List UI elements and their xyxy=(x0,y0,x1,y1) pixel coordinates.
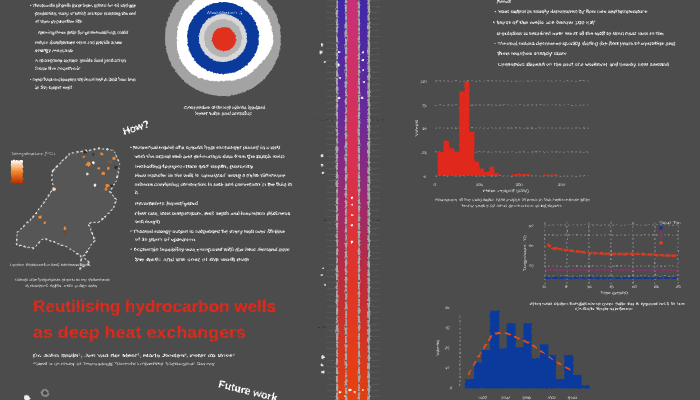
text block: introduction bullets: • Deep heat exchangers are insulated to limit heat loss xyxy=(30,77,136,83)
red line xyxy=(547,244,677,256)
caption: histogram: Histogram of the calculated heat output of wells in the Netherlands after xyxy=(435,197,591,202)
central tube xyxy=(347,0,358,400)
wall specks xyxy=(337,0,368,400)
caption: histogram xyxy=(435,197,591,208)
outer casing xyxy=(336,0,370,400)
y tick labels: 25 xyxy=(422,150,427,155)
text block: method: Heat transfer in the well is calculated using a finite difference xyxy=(135,173,285,179)
y tick labels: 100 xyxy=(420,79,427,84)
text block: introduction bullets: from the reservoir xyxy=(35,66,80,72)
x tick labels: 0 xyxy=(543,284,546,289)
text block: method: • Thermal energy output is calculated for every well over lifetime xyxy=(130,229,285,235)
map colour bar xyxy=(11,160,23,183)
caption: map xyxy=(15,277,110,288)
y axis label: Wells xyxy=(414,120,419,136)
red core xyxy=(212,27,236,51)
text block: method: and length xyxy=(135,219,160,225)
x tick labels: 0 xyxy=(434,182,437,187)
x tick labels xyxy=(434,182,565,187)
legend: Tout Tin xyxy=(659,220,681,225)
text block: introduction bullets: • Thousands of wells have been drilled for oil and gas xyxy=(30,3,136,9)
y tick labels xyxy=(420,79,427,179)
title xyxy=(33,297,276,342)
x tick labels: 300 xyxy=(558,182,565,187)
y axis label: Temperature (°C) xyxy=(522,234,527,271)
x tick labels: 2000 xyxy=(501,395,511,400)
caption: cross-section: inner tube and annulus xyxy=(195,111,252,117)
y tick labels xyxy=(445,305,453,390)
text block: method: Parameters investigated xyxy=(135,201,198,207)
chart: heat output histogram (red) xyxy=(414,79,590,193)
text block: results: Result xyxy=(497,0,511,5)
text block: method: with the actual well and subsurface data from the Dutch wells xyxy=(134,154,285,160)
x axis label: Time (years) xyxy=(600,290,629,295)
text block: results xyxy=(493,0,675,68)
text block: method: it xyxy=(135,190,138,196)
text block: results: • Most of the wells are below 100 kW xyxy=(493,20,596,26)
depth ticks xyxy=(316,120,385,327)
caption: map: at reservoir depth, from public data xyxy=(25,283,98,288)
map: Netherlands well temperatures xyxy=(10,148,120,268)
title: Reutilising hydrocarbon wells xyxy=(33,297,276,316)
left annulus xyxy=(338,0,345,400)
legend xyxy=(659,220,681,245)
text block: method: Flow rate, inlet temperature, well depth and insulation thickness xyxy=(135,211,290,217)
depth labels xyxy=(320,44,326,374)
x tick labels: 10 xyxy=(587,284,592,289)
ring labels: Insulation 1 xyxy=(207,10,244,15)
y tick labels: 60 xyxy=(529,223,534,228)
caption: map: Bottom hole temperature of wells in the Netherlands xyxy=(15,277,110,282)
grid lines xyxy=(435,81,590,176)
x axis label: Heat output (kW) xyxy=(483,188,530,193)
text block: method: the wells and the cost of the work over xyxy=(135,257,250,263)
x tick labels: 25 xyxy=(654,284,659,289)
y tick labels: 10 xyxy=(445,365,450,370)
caption: histogram: thirty years of heat production in kilowatts xyxy=(462,203,562,208)
y tick labels: 30 xyxy=(445,325,450,330)
blue line xyxy=(545,277,677,279)
text block: results: • Heat output is mainly determined by flow rate and temperature xyxy=(495,9,647,15)
chart: well depth histogram (blue) xyxy=(435,305,590,400)
x tick labels: 1000 xyxy=(478,395,488,400)
text block: introduction bullets: in the upper well xyxy=(35,85,72,91)
text block: results: Economics depend on the cost of a workover and nearby heat demand xyxy=(498,62,669,68)
text block: method xyxy=(130,145,292,263)
x tick labels: 100 xyxy=(476,182,483,187)
text block: introduction bullets: production, many of which are now reaching the end xyxy=(35,11,136,17)
text block: method: scheme combining conduction in rock and convection in the fluid in xyxy=(135,182,292,188)
y tick labels: 0 xyxy=(450,385,453,390)
orange curve xyxy=(468,333,573,375)
x tick labels xyxy=(543,284,681,289)
x tick labels: 20 xyxy=(632,284,637,289)
chart: temperature over time (lines) xyxy=(522,220,681,295)
text block: results: Insulation is required over most of the well to limit heat loss in the xyxy=(497,31,664,37)
blue bars xyxy=(465,311,590,388)
x tick labels: 5000 xyxy=(568,395,578,400)
blue annulus ring xyxy=(187,2,259,74)
caption: temperature chart xyxy=(530,302,685,311)
right annulus xyxy=(360,0,368,400)
caption: temperature chart: Dutch subsurface xyxy=(575,307,633,311)
text block: method: • Economic feasibility was compared with the heat demand near xyxy=(130,247,290,253)
grid xyxy=(544,222,680,287)
text block: introduction bullets: of their productive life xyxy=(35,19,82,25)
white flow markers xyxy=(338,51,365,397)
text block: introduction bullets xyxy=(30,3,136,91)
caption: cross-section: Cross-section of the well with the insulated xyxy=(184,105,265,111)
bottom-left icons xyxy=(24,389,49,400)
title: as deep heat exchangers xyxy=(33,323,246,342)
map outline xyxy=(17,148,120,268)
y tick labels: 20 xyxy=(445,345,450,350)
x tick labels: 30 xyxy=(676,284,681,289)
map legend title: Temperature (°C) xyxy=(11,151,56,156)
purple line xyxy=(547,269,677,271)
heading: How?: How? xyxy=(122,119,151,138)
text block: method: of 30 years of operation xyxy=(135,237,195,243)
text block: introduction bullets: energy resource xyxy=(35,48,73,54)
text block: introduction bullets: reduce abandonment costs and provide a new xyxy=(35,40,122,46)
caption: temperature chart: Inlet and outlet temperature over time for a typical well in the xyxy=(530,302,685,306)
speckled halo xyxy=(331,0,375,400)
y tick labels: 75 xyxy=(422,103,427,108)
y tick labels: 0 xyxy=(424,174,427,179)
inner grey ring xyxy=(199,14,247,62)
white cement ring xyxy=(177,0,273,81)
text block: introduction bullets: Reusing these wells for geothermal heat could xyxy=(38,30,128,36)
text block: method: • Numerical model of a coaxial heat exchanger placed in a well xyxy=(130,145,280,151)
x tick labels: 3000 xyxy=(522,395,532,400)
authors xyxy=(33,353,236,366)
text block: results: then reaches steady state xyxy=(497,51,567,57)
y tick labels: 40 xyxy=(529,243,534,248)
diagram: well cross-section target xyxy=(165,0,281,96)
caption: cross-section xyxy=(184,105,265,117)
y tick labels: 20 xyxy=(529,263,534,268)
map footer note: Location of hydrocarbon wells with temperatures xyxy=(10,262,90,267)
x tick labels: 4000 xyxy=(547,395,557,400)
x tick labels: 200 xyxy=(516,182,523,187)
y tick labels xyxy=(529,223,534,268)
y tick labels: 50 xyxy=(422,126,427,131)
diagram: well pipe longitudinal section xyxy=(316,0,385,400)
x tick labels xyxy=(478,395,578,400)
text block: results: • Thermal output decreases quickly during the first years of operation and xyxy=(494,41,675,47)
text block: method: including temperature and depth, porosity xyxy=(135,164,253,170)
x tick labels: 15 xyxy=(609,284,614,289)
y axis xyxy=(459,316,461,388)
x tick labels: 5 xyxy=(565,284,568,289)
authors: Dr. John Smith¹, Jan van der Meer², Maria Jansen³, Peter de Vries¹ xyxy=(33,353,236,359)
red bars xyxy=(438,82,557,176)
text block: introduction bullets: A closed loop system avoids fluid production xyxy=(35,58,126,64)
y axis label: Wells xyxy=(435,340,440,356)
y tick labels: 40 xyxy=(445,305,450,310)
authors: ¹Delft University of Technology ²Utrecht University ³Geological Survey xyxy=(33,361,215,366)
outer casing ring xyxy=(165,0,281,96)
